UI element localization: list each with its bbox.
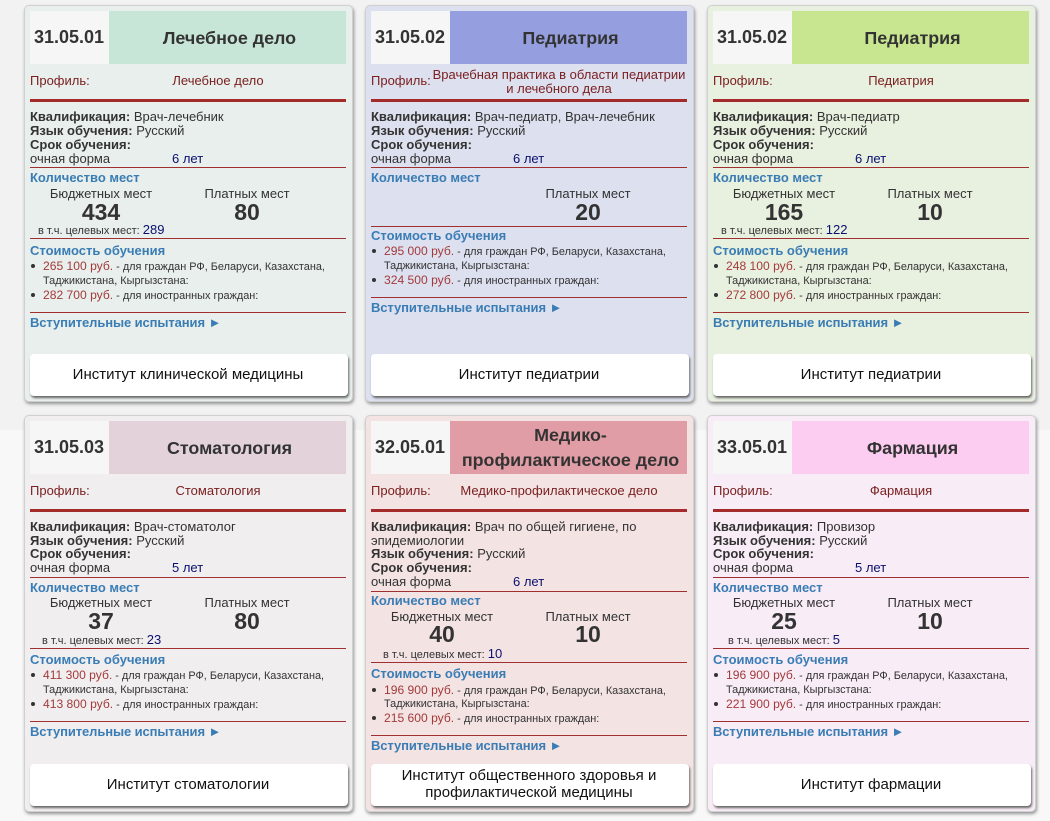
- cost resident continued: Таджикистана, Кыргызстана:: [726, 275, 872, 287]
- cost resident: 196 900 руб. - для граждан РФ, Беларуси, Казахстана,: [726, 668, 1008, 682]
- study form: [371, 574, 544, 589]
- panel: Педиатрия 31.05.02 blue: 6 лет: [513, 151, 544, 166]
- cost heading: Стоимость обучения: [713, 652, 848, 667]
- profile value: и лечебного дела: [506, 81, 612, 96]
- institute button: Институт педиатрии: [801, 366, 941, 382]
- institute button: [371, 764, 689, 806]
- language: Язык обучения: Русский: [30, 123, 184, 138]
- profile value: Стоматология: [175, 483, 261, 498]
- institute button: Институт клинической медицины: [73, 366, 303, 382]
- study form: [713, 560, 886, 575]
- heading: Медико-: [534, 425, 607, 445]
- language: Язык обучения: Русский: [713, 123, 867, 138]
- cost heading: Стоимость обучения: [30, 652, 165, 667]
- code: [371, 421, 450, 474]
- duration: Срок обучения:: [371, 560, 472, 575]
- paid seats number: 20: [575, 199, 601, 225]
- target seats: в т.ч. целевых мест: 289: [38, 222, 164, 237]
- cost heading: Стоимость обучения: [371, 666, 506, 681]
- entrance exams link: Вступительные испытания ►: [371, 738, 562, 753]
- duration: Срок обучения:: [713, 137, 814, 152]
- study form: очная форма: [30, 560, 110, 575]
- seats heading: Количество мест: [30, 580, 140, 595]
- duration: Срок обучения:: [371, 137, 472, 152]
- panel: Лечебное дело 31.05.01: 6 лет: [172, 151, 203, 166]
- heading: Фармация: [867, 438, 958, 458]
- paid seats label: Платных мест: [204, 595, 290, 610]
- code: [713, 421, 792, 474]
- target seats: в т.ч. целевых мест: 23: [42, 632, 161, 647]
- duration: Срок обучения:: [713, 546, 814, 561]
- code: 31.05.02: [375, 27, 445, 47]
- study form: очная форма: [30, 151, 110, 166]
- code: 31.05.01: [34, 27, 104, 47]
- paid seats number: 10: [917, 199, 943, 225]
- heading: [109, 11, 346, 64]
- heading: Стоматология: [167, 438, 292, 458]
- paid seats number: 10: [575, 621, 601, 647]
- profile value: [433, 67, 685, 96]
- cost foreign: 413 800 руб. - для иностранных граждан:: [43, 697, 258, 711]
- cost resident continued: Таджикистана, Кыргызстана:: [384, 698, 530, 710]
- paid seats label: Платных мест: [545, 186, 631, 201]
- qualification: Квалификация: Врач-лечебник: [30, 109, 224, 124]
- code: [30, 421, 109, 474]
- paid seats label: Платных мест: [887, 595, 973, 610]
- profile value: Врачебная практика в области педиатрии: [433, 67, 685, 82]
- institute button: Институт стоматологии: [107, 776, 269, 792]
- study form: очная форма: [371, 574, 451, 589]
- duration: Срок обучения:: [30, 546, 131, 561]
- institute button: [30, 354, 348, 396]
- heading: [450, 421, 687, 474]
- heading: [450, 11, 687, 64]
- institute button: [371, 354, 689, 396]
- institute button: [713, 354, 1031, 396]
- entrance exams link: Вступительные испытания ►: [371, 300, 562, 315]
- study form: очная форма: [371, 151, 451, 166]
- institute button: Институт общественного здоровья и: [402, 767, 656, 784]
- duration: Срок обучения:: [30, 137, 131, 152]
- study form: очная форма: [713, 560, 793, 575]
- cost heading: Стоимость обучения: [30, 243, 165, 258]
- code: 33.05.01: [717, 437, 787, 457]
- heading: [792, 421, 1029, 474]
- institute button: [713, 764, 1031, 806]
- panel: Медико-профилактическое дело 32.05.01: 6 лет: [513, 574, 544, 589]
- budget seats number: 165: [765, 199, 803, 225]
- study form: очная форма: [713, 151, 793, 166]
- panel: Педиатрия 31.05.02 green: [708, 6, 1035, 401]
- cost resident continued: Таджикистана, Кыргызстана:: [384, 260, 530, 272]
- cost resident: 411 300 руб. - для граждан РФ, Беларуси, Казахстана,: [43, 668, 324, 682]
- budget seats label: Бюджетных мест: [391, 609, 493, 624]
- paid seats label: Платных мест: [204, 186, 290, 201]
- cost foreign: 221 900 руб. - для иностранных граждан:: [726, 697, 941, 711]
- entrance exams link: Вступительные испытания ►: [30, 315, 221, 330]
- panel: Стоматология 31.05.03: [25, 416, 352, 811]
- profile value: Педиатрия: [868, 73, 934, 88]
- seats heading: Количество мест: [371, 593, 481, 608]
- institute button: профилактической медицины: [425, 784, 633, 801]
- budget seats number: 25: [771, 608, 797, 634]
- qualification: Квалификация: Врач-стоматолог: [30, 519, 236, 534]
- budget seats label: Бюджетных мест: [50, 595, 152, 610]
- language: Язык обучения: Русский: [371, 546, 525, 561]
- cost resident: 248 100 руб. - для граждан РФ, Беларуси, Казахстана,: [726, 259, 1008, 273]
- code: 31.05.03: [34, 437, 104, 457]
- seats heading: Количество мест: [713, 580, 823, 595]
- cost resident: 295 000 руб. - для граждан РФ, Беларуси, Казахстана,: [384, 244, 666, 258]
- study form: [30, 560, 203, 575]
- study form: [371, 151, 544, 166]
- target seats: в т.ч. целевых мест: 122: [721, 222, 847, 237]
- cost heading: Стоимость обучения: [371, 228, 506, 243]
- budget seats number: 40: [429, 621, 455, 647]
- budget seats number: 37: [88, 608, 114, 634]
- panel: Медико-профилактическое дело 32.05.01: [366, 416, 693, 811]
- budget seats label: Бюджетных мест: [733, 186, 835, 201]
- cost foreign: 272 800 руб. - для иностранных граждан:: [726, 288, 941, 302]
- paid seats number: 80: [234, 199, 260, 225]
- profile label: Профиль:: [713, 73, 773, 88]
- language: Язык обучения: Русский: [371, 123, 525, 138]
- code: 32.05.01: [375, 437, 445, 457]
- profile label: Профиль:: [713, 483, 773, 498]
- study form: [30, 151, 203, 166]
- entrance exams link: Вступительные испытания ►: [713, 724, 904, 739]
- cost heading: Стоимость обучения: [713, 243, 848, 258]
- qualification: Квалификация: Врач-педиатр: [713, 109, 900, 124]
- institute button: [30, 764, 348, 806]
- profile value: Фармация: [870, 483, 932, 498]
- panel: Стоматология 31.05.03: 5 лет: [172, 560, 203, 575]
- paid seats label: Платных мест: [887, 186, 973, 201]
- cost resident continued: Таджикистана, Кыргызстана:: [43, 684, 189, 696]
- panel: Педиатрия 31.05.02 green: 6 лет: [855, 151, 886, 166]
- paid seats number: 10: [917, 608, 943, 634]
- cost resident: 265 100 руб. - для граждан РФ, Беларуси, Казахстана,: [43, 259, 325, 273]
- qualification: Квалификация: Врач по общей гигиене, по: [371, 519, 636, 534]
- institute button: Институт фармации: [801, 776, 941, 792]
- cost resident continued: Таджикистана, Кыргызстана:: [726, 684, 872, 696]
- target seats: в т.ч. целевых мест: 10: [383, 646, 502, 661]
- profile value: Медико-профилактическое дело: [460, 483, 658, 498]
- panel: Лечебное дело 31.05.01: [25, 6, 352, 401]
- budget seats label: Бюджетных мест: [733, 595, 835, 610]
- heading: профилактическое дело: [462, 450, 679, 470]
- heading: [792, 11, 1029, 64]
- target seats: в т.ч. целевых мест: 5: [728, 632, 840, 647]
- entrance exams link: Вступительные испытания ►: [713, 315, 904, 330]
- seats heading: Количество мест: [371, 170, 481, 185]
- study form: [713, 151, 886, 166]
- qualification continued: эпидемиологии: [371, 533, 464, 548]
- panel: Фармация 33.05.01: [708, 416, 1035, 811]
- cost foreign: 324 500 руб. - для иностранных граждан:: [384, 273, 599, 287]
- code: [30, 11, 109, 64]
- profile label: Профиль:: [30, 483, 90, 498]
- profile label: Профиль:: [371, 483, 431, 498]
- paid seats number: 80: [234, 608, 260, 634]
- language: Язык обучения: Русский: [713, 533, 867, 548]
- panel: Педиатрия 31.05.02 blue: [366, 6, 693, 401]
- heading: Педиатрия: [522, 28, 619, 48]
- language: Язык обучения: Русский: [30, 533, 184, 548]
- profile label: Профиль:: [30, 73, 90, 88]
- cost foreign: 215 600 руб. - для иностранных граждан:: [384, 711, 599, 725]
- code: 31.05.02: [717, 27, 787, 47]
- qualification: Квалификация: Провизор: [713, 519, 875, 534]
- budget seats number: 434: [82, 199, 120, 225]
- heading: [109, 421, 346, 474]
- qualification: Квалификация: Врач-педиатр, Врач-лечебник: [371, 109, 655, 124]
- cost resident continued: Таджикистана, Кыргызстана:: [43, 275, 189, 287]
- cost resident: 196 900 руб. - для граждан РФ, Беларуси, Казахстана,: [384, 683, 666, 697]
- entrance exams link: Вступительные испытания ►: [30, 724, 221, 739]
- code: [371, 11, 450, 64]
- institute button: Институт педиатрии: [459, 366, 599, 382]
- code: [713, 11, 792, 64]
- profile value: Лечебное дело: [172, 73, 264, 88]
- heading: Лечебное дело: [163, 28, 296, 48]
- panel: Фармация 33.05.01: 5 лет: [855, 560, 886, 575]
- heading: Педиатрия: [864, 28, 961, 48]
- seats heading: Количество мест: [30, 170, 140, 185]
- budget seats label: Бюджетных мест: [50, 186, 152, 201]
- cost foreign: 282 700 руб. - для иностранных граждан:: [43, 288, 258, 302]
- profile label: Профиль:: [371, 73, 431, 88]
- seats heading: Количество мест: [713, 170, 823, 185]
- paid seats label: Платных мест: [545, 609, 631, 624]
